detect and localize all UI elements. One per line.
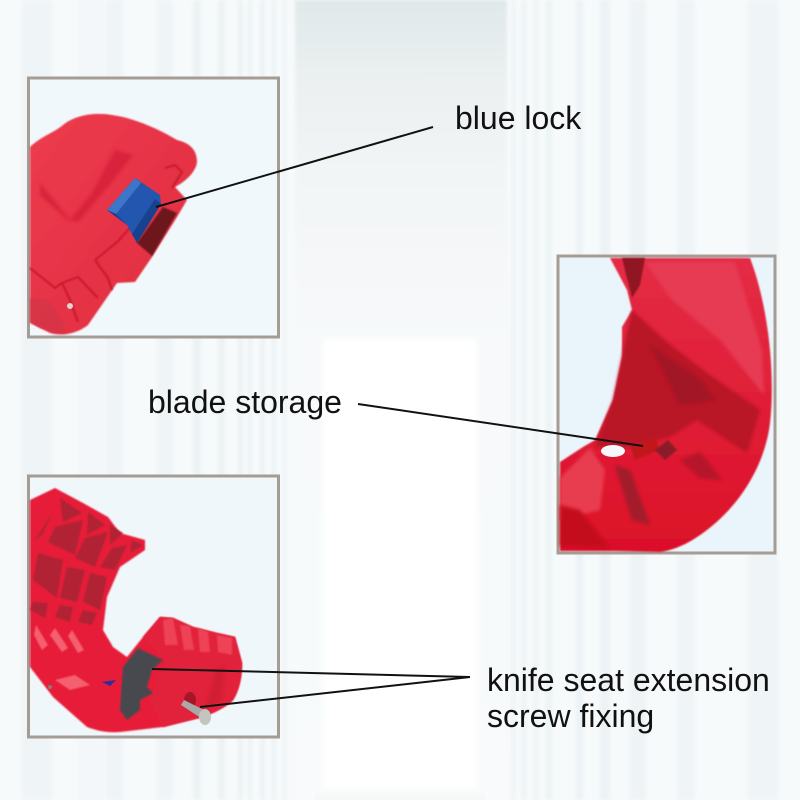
leader line: blue lock	[156, 127, 433, 207]
icon: screw	[181, 700, 211, 725]
icon: blue detail	[102, 680, 116, 686]
lower ribs	[34, 625, 90, 690]
label: blue lock: blue lock	[455, 100, 582, 136]
leader lines: knife seat and screw	[152, 669, 470, 707]
tool body	[30, 114, 197, 334]
panel: blue lock photo	[28, 78, 278, 337]
hole	[601, 445, 625, 457]
raised grip	[40, 150, 133, 222]
highlight facets	[645, 262, 764, 395]
leader line: blade storage	[358, 404, 643, 446]
panel: knife seat photo	[28, 476, 278, 737]
label: knife seat extension screw fixing: knife seat extension	[487, 662, 770, 698]
label: blade storage: blade storage	[148, 384, 342, 420]
hinge outlines	[30, 165, 182, 322]
lock shadow	[137, 207, 177, 256]
icon: blue lock	[107, 178, 161, 243]
label: knife seat extension screw fixing: screw fixing	[487, 698, 654, 734]
grid cells	[30, 498, 143, 625]
dark recess	[595, 310, 760, 453]
knife seat block	[143, 617, 242, 727]
icon: knife blade	[120, 648, 163, 720]
panel: blade storage photo	[558, 256, 775, 553]
tool shell	[30, 488, 242, 732]
